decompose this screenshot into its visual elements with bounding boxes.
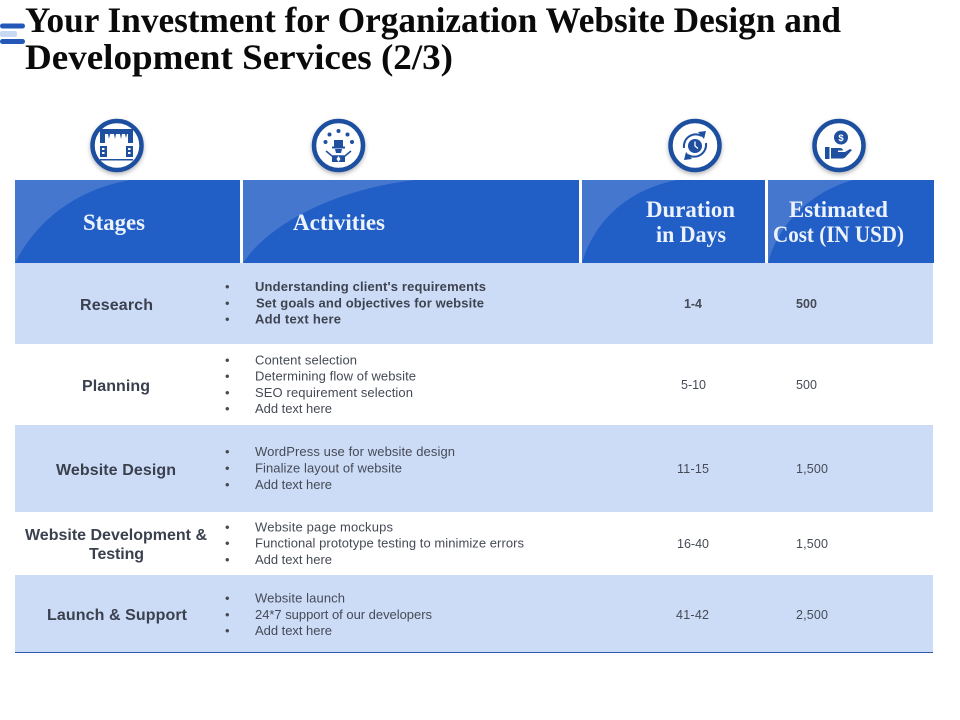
row: planning: Add text here (255, 401, 332, 416)
row: website development and testing: Add text here (255, 552, 332, 567)
row: website design: Finalize layout of website (255, 460, 402, 476)
row: planning: • (225, 352, 230, 368)
row: website development and testing: • (225, 552, 230, 567)
row: launch and support: 41-42 (676, 608, 709, 622)
row: launch and support: 24*7 support of our developers (255, 607, 432, 622)
row: research: Add text here (255, 312, 341, 326)
row: launch and support: Website launch (255, 590, 345, 606)
icon: clock with cycle arrows (670, 121, 720, 170)
row: website design: • (225, 460, 230, 476)
header cell: cost: Estimated (789, 197, 888, 222)
row: launch and support: 2,500 (796, 608, 828, 622)
title: Your Investment for Organization Website Design and (25, 0, 841, 40)
decorative accent bars (0, 24, 25, 44)
icon: hand holding coin: $ (838, 133, 844, 144)
row: planning: • (225, 401, 230, 416)
row: research: Research (80, 297, 153, 314)
title: Development Services (2/3) (25, 37, 453, 77)
row: research: • (225, 296, 230, 310)
row: research: Set goals and objectives for website (256, 296, 484, 310)
row: research: 500 (796, 297, 817, 311)
icon: performer juggling (314, 121, 363, 170)
row: launch and support: Add text here (255, 623, 332, 638)
row: website development and testing: • (225, 536, 230, 550)
row: launch and support: • (225, 623, 230, 638)
row: website development and testing: Functional prototype testing to minimize errors (255, 536, 524, 550)
header cell: activities (243, 180, 579, 263)
row: planning: SEO requirement selection (255, 385, 413, 400)
row: website development and testing: Website page mockups (255, 520, 394, 534)
row: launch and support: • (225, 607, 230, 622)
row: website design: Website Design (56, 462, 176, 479)
header cell: stages (15, 180, 240, 263)
row: website development and testing: Testing (89, 546, 144, 563)
header cell: duration: in Days (656, 222, 726, 247)
row: website development and testing: 1,500 (796, 537, 828, 551)
icon: hand holding coin (814, 121, 864, 170)
row: website design (15, 425, 933, 512)
header cell: activities: Activities (293, 210, 385, 235)
row: research: • (225, 312, 230, 326)
row: launch and support (15, 575, 933, 653)
row: research: 1-4 (684, 297, 702, 311)
row: planning (15, 344, 933, 425)
row: planning: • (225, 368, 230, 384)
row: research: • (225, 279, 230, 294)
row: website design: Add text here (255, 477, 332, 492)
row: website development and testing: 16-40 (677, 537, 709, 551)
header cell: cost (768, 180, 934, 263)
row: research (15, 263, 933, 344)
row: planning: 500 (796, 378, 817, 392)
row: launch and support: Launch & Support (47, 607, 188, 624)
header cell: cost: Cost (IN USD) (773, 222, 904, 247)
row: website design: • (225, 444, 230, 459)
row: planning: Planning (82, 378, 150, 395)
row: website development and testing (15, 512, 933, 575)
header cell: duration (582, 180, 765, 263)
row: planning: 5-10 (681, 378, 706, 392)
row: website development and testing: • (225, 520, 230, 534)
row: website design: 1,500 (796, 462, 828, 476)
row: website design: WordPress use for website design (255, 444, 455, 459)
row: planning: Content selection (255, 352, 357, 368)
row: launch and support: • (225, 590, 230, 606)
header cell: stages: Stages (83, 210, 145, 235)
header cell: duration: Duration (646, 197, 735, 222)
row: website design: 11-15 (677, 462, 709, 476)
row: website development and testing: Website Development & (25, 527, 207, 544)
row: research: Understanding client's requirements (255, 279, 486, 294)
title (25, 0, 841, 77)
row: planning: • (225, 385, 230, 400)
icon: stage (92, 121, 142, 170)
row: planning: Determining flow of website (255, 368, 416, 384)
row: website design: • (225, 477, 230, 492)
table header (15, 180, 934, 263)
